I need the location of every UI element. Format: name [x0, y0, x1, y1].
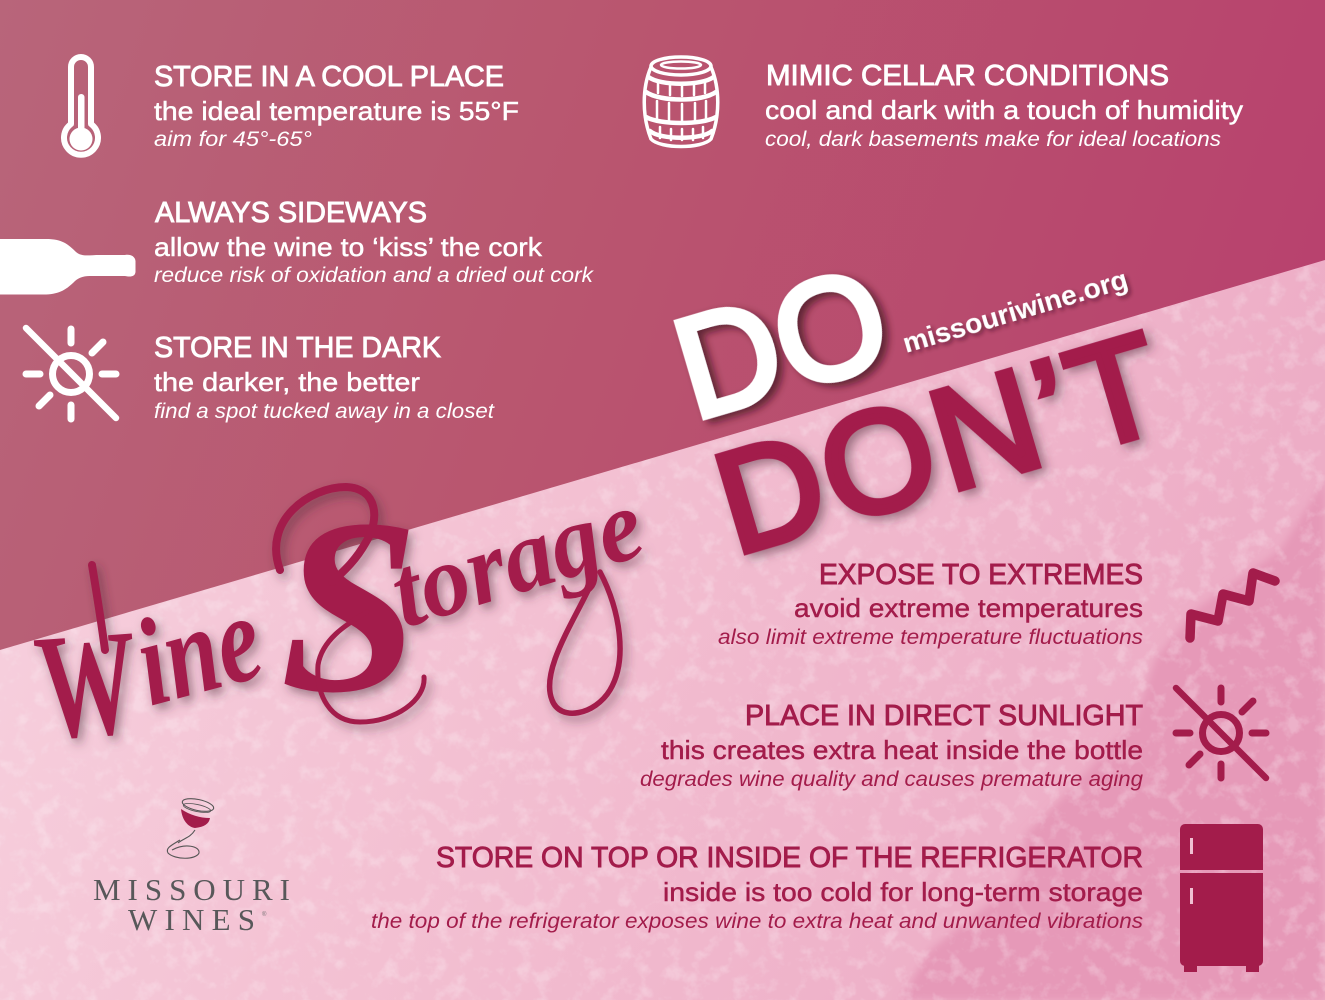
tip: always sideways: reduce risk of oxidation and a dried out cork — [154, 264, 595, 287]
logo: missouri wines: WINES — [128, 902, 255, 937]
tip: place in direct sunlight — [640, 700, 1143, 791]
tip: store in the dark: find a spot tucked away in a closet — [154, 400, 495, 423]
background: light "don't" panel — [0, 260, 1325, 1000]
logo: missouri wines: ® — [262, 911, 267, 918]
tip: expose to extremes: avoid extreme temperatures — [794, 593, 1143, 623]
website link: missouriwine.org — [899, 263, 1131, 359]
title: wine storage — [18, 467, 656, 770]
tip: place in direct sunlight: degrades wine quality and causes premature aging — [640, 768, 1143, 791]
tip: store in the dark — [154, 332, 495, 423]
tip: store in the dark: the darker, the better — [154, 367, 420, 397]
tip: store in a cool place — [154, 61, 519, 151]
tip: store on or inside the refrigerator — [371, 842, 1144, 933]
tip: mimic cellar conditions: MIMIC CELLAR CONDITIONS — [766, 60, 1169, 92]
icon: temperature zigzag — [1190, 573, 1275, 638]
tip: always sideways: ALWAYS SIDEWAYS — [155, 197, 427, 229]
tip: store on or inside the refrigerator: STORE ON TOP OR INSIDE OF THE REFRIGERATOR — [436, 842, 1143, 874]
logo wordmark: MISSOURI — [93, 872, 290, 907]
tip: store on or inside the refrigerator: the top of the refrigerator exposes wine to extra heat and unwanted vibrations — [371, 910, 1144, 933]
tip: store in a cool place: aim for 45°-65° — [154, 128, 312, 151]
tip: place in direct sunlight: this creates extra heat inside the bottle — [661, 735, 1143, 765]
tip: store on or inside the refrigerator: inside is too cold for long-term storage — [663, 877, 1143, 907]
title: wine storage: S — [280, 468, 419, 745]
icon: wine bottle on its side — [0, 239, 136, 294]
tip: place in direct sunlight: PLACE IN DIRECT SUNLIGHT — [745, 700, 1143, 732]
tip: expose to extremes — [718, 559, 1144, 649]
icon: refrigerator — [1180, 824, 1263, 972]
tip: expose to extremes: also limit extreme temperature fluctuations — [718, 626, 1144, 649]
icon: wine glass — [167, 796, 215, 858]
icon: wine barrel — [644, 57, 718, 146]
icon: crossed-out sun — [26, 328, 116, 419]
tip: mimic cellar conditions — [765, 60, 1243, 151]
tip: always sideways: allow the wine to ‘kiss’ the cork — [154, 232, 543, 262]
panel: do list — [154, 60, 1243, 423]
logo: missouri wines — [93, 796, 290, 937]
tip: expose to extremes: EXPOSE TO EXTREMES — [819, 559, 1143, 591]
tip: mimic cellar conditions: cool and dark with a touch of humidity — [765, 95, 1243, 125]
tip: store in a cool place: the ideal temperature is 55°F — [154, 96, 519, 126]
tip: mimic cellar conditions: cool, dark basements make for ideal locations — [765, 128, 1222, 151]
tip: store in a cool place: STORE IN A COOL PLACE — [154, 61, 504, 93]
icon: thermometer — [64, 57, 98, 155]
tip: always sideways — [154, 197, 595, 287]
icon: crossed-out sun — [1176, 688, 1266, 778]
panel: don't list — [371, 559, 1144, 933]
title: wine storage: ine — [122, 568, 275, 733]
title: wine storage: W — [18, 598, 160, 770]
heading: don't: DON’T — [698, 302, 1180, 585]
title: wine storage: torage — [378, 467, 656, 650]
heading: do: DO — [658, 238, 905, 450]
tip: store in the dark: STORE IN THE DARK — [154, 332, 442, 364]
